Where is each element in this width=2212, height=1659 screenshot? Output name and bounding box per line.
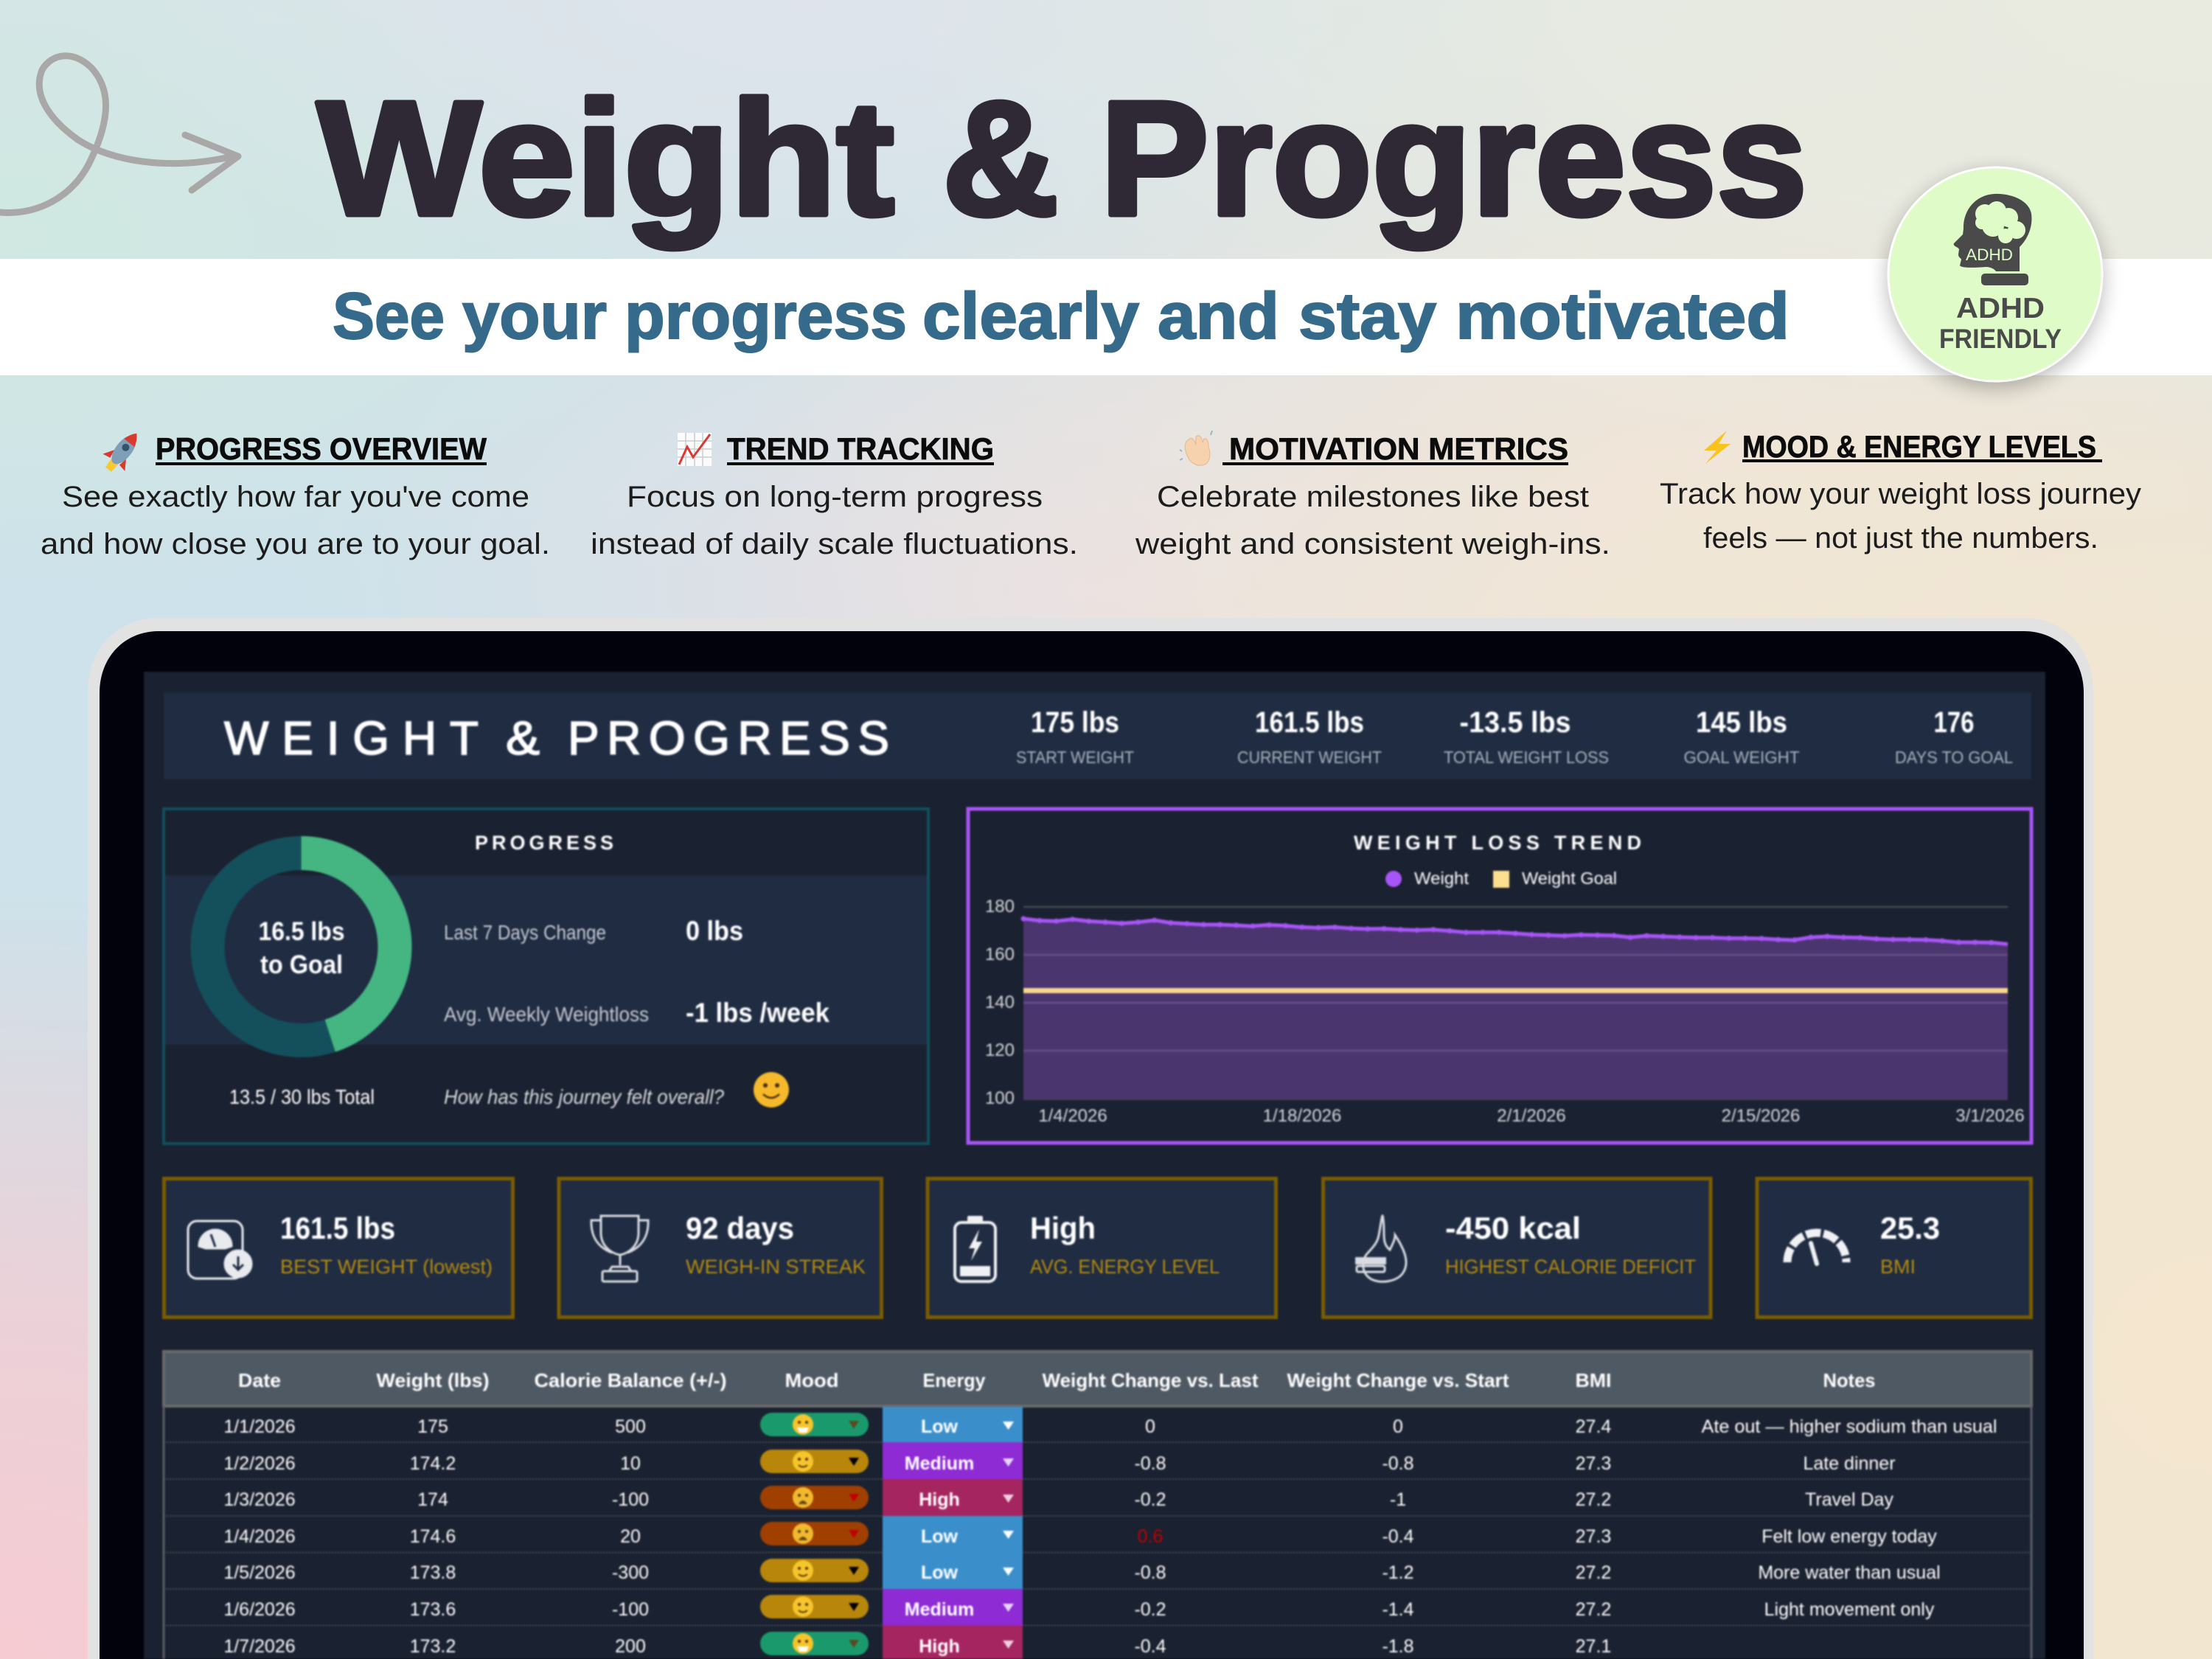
weight line bbox=[1023, 919, 2008, 944]
row 4: 1/4/2026 bbox=[223, 1526, 296, 1547]
row 2: -0.8 bbox=[1382, 1453, 1414, 1474]
subtitle: your bbox=[462, 279, 607, 352]
row 7: High bbox=[919, 1636, 960, 1657]
row 7: 1/7/2026 bbox=[223, 1636, 296, 1657]
icon: head with brain: ADHD bbox=[1966, 246, 2013, 264]
title bbox=[317, 67, 1807, 249]
panel: progress bbox=[164, 809, 928, 1144]
table header: Calorie Balance (+/-) bbox=[534, 1369, 727, 1391]
total label: 13.5 / 30 lbs Total bbox=[229, 1085, 375, 1108]
row 1: Low bbox=[921, 1416, 959, 1437]
feature: progress overview bbox=[41, 425, 550, 560]
card: average energy bbox=[928, 1178, 1276, 1317]
row 4: 0.6 bbox=[1138, 1526, 1163, 1547]
row 3: 174 bbox=[417, 1489, 448, 1510]
table header: BMI bbox=[1575, 1369, 1612, 1391]
row 2: 10 bbox=[620, 1453, 641, 1474]
badge: ADHD friendly bbox=[1888, 167, 2103, 388]
row 5: -300 bbox=[612, 1562, 649, 1583]
row 1: Ate out — higher sodium than usual bbox=[1702, 1416, 1997, 1437]
row 4 bbox=[223, 1516, 1937, 1553]
row 1: 0 bbox=[1145, 1416, 1155, 1437]
card: calorie deficit: HIGHEST CALORIE DEFICIT bbox=[1445, 1256, 1696, 1278]
card: BMI: 25.3 bbox=[1880, 1211, 1940, 1245]
donut label: 16.5 lbs bbox=[258, 917, 345, 946]
card: BMI bbox=[1757, 1178, 2031, 1317]
icon: chart bbox=[678, 433, 712, 466]
line chart bbox=[985, 897, 2025, 1126]
stat: goal weight bbox=[1684, 706, 1799, 767]
legend: Weight Goal bbox=[1522, 869, 1617, 888]
dashboard title: WEIGHT bbox=[224, 712, 479, 765]
row 6: -100 bbox=[612, 1599, 649, 1620]
row 6: Light movement only bbox=[1764, 1599, 1935, 1620]
subtitle: See bbox=[333, 279, 445, 352]
row 3 bbox=[223, 1479, 1893, 1516]
row 5 bbox=[223, 1553, 1941, 1589]
row 4: 27.3 bbox=[1576, 1526, 1611, 1547]
stat: goal weight: 145 lbs bbox=[1696, 706, 1787, 739]
title: & bbox=[942, 67, 1059, 249]
y axis labels: 160 bbox=[985, 945, 1015, 964]
stat: days to goal bbox=[1895, 706, 2013, 767]
stat: start weight bbox=[1016, 706, 1134, 767]
table header: Weight Change vs. Last bbox=[1043, 1369, 1259, 1391]
subtitle: stay bbox=[1298, 279, 1437, 352]
dashboard screen bbox=[144, 672, 2045, 1659]
x axis labels: 1/18/2026 bbox=[1263, 1106, 1341, 1126]
row 2 bbox=[223, 1442, 1896, 1479]
metric: last 7 days: Last 7 Days Change bbox=[444, 921, 606, 944]
description: feels — not just the numbers. bbox=[1703, 522, 2098, 554]
description bbox=[41, 481, 550, 560]
x axis labels: 2/1/2026 bbox=[1497, 1106, 1566, 1126]
row 6: 1/6/2026 bbox=[223, 1599, 296, 1620]
card: calorie deficit bbox=[1323, 1178, 1711, 1317]
subtitle band bbox=[0, 259, 2212, 375]
icon: flame bbox=[1355, 1215, 1406, 1281]
donut label: to Goal bbox=[260, 950, 343, 979]
journey question: How has this journey felt overall? bbox=[444, 1085, 724, 1108]
card: average energy: High bbox=[1030, 1211, 1096, 1245]
metric: last 7 days bbox=[444, 916, 743, 946]
stat: current weight: CURRENT WEIGHT bbox=[1237, 748, 1382, 767]
feature: mood and energy levels bbox=[1660, 429, 2141, 554]
goal line bbox=[1023, 988, 2008, 993]
subtitle bbox=[333, 279, 1790, 352]
card: weigh-in streak: WEIGH-IN STREAK bbox=[686, 1256, 866, 1278]
stat: total weight loss: TOTAL WEIGHT LOSS bbox=[1444, 748, 1609, 767]
icon: rocket bbox=[97, 425, 147, 478]
x axis labels bbox=[1038, 1106, 2025, 1126]
y axis labels bbox=[985, 897, 1015, 1108]
row 2: 174.2 bbox=[410, 1453, 456, 1474]
row 7: 27.1 bbox=[1576, 1636, 1611, 1657]
row 1 bbox=[223, 1407, 1997, 1442]
dashboard title: PROGRESS bbox=[568, 712, 889, 765]
stat: days to goal: 176 bbox=[1933, 706, 1975, 739]
row 2: Medium bbox=[905, 1453, 974, 1474]
row 2: 27.3 bbox=[1576, 1453, 1611, 1474]
icon: lightning bolt bbox=[1704, 431, 1731, 464]
heading: TREND TRACKING bbox=[727, 431, 994, 466]
description: Track how your weight loss journey bbox=[1660, 478, 2141, 510]
row 2: 1/2/2026 bbox=[223, 1453, 296, 1474]
row 3: High bbox=[919, 1489, 960, 1510]
metric: average weekly loss: Avg. Weekly Weightloss bbox=[444, 1003, 649, 1026]
row 1: 175 bbox=[417, 1416, 448, 1437]
title: Progress bbox=[1100, 67, 1807, 249]
metric: average weekly loss bbox=[444, 998, 830, 1028]
panel heading: PROGRESS bbox=[475, 832, 613, 854]
stat: current weight bbox=[1237, 706, 1382, 767]
row 4: -0.4 bbox=[1382, 1526, 1414, 1547]
row 2: -0.8 bbox=[1134, 1453, 1166, 1474]
row 1: 0 bbox=[1393, 1416, 1403, 1437]
row 3: 1/3/2026 bbox=[223, 1489, 296, 1510]
table header: Date bbox=[238, 1369, 281, 1391]
card: best weight: 161.5 lbs bbox=[280, 1211, 395, 1245]
x axis labels: 2/15/2026 bbox=[1722, 1106, 1800, 1126]
row 2: Late dinner bbox=[1803, 1453, 1896, 1474]
subtitle: motivated bbox=[1455, 279, 1790, 352]
table header: Notes bbox=[1823, 1369, 1876, 1391]
arrow: swirl decoration bbox=[0, 56, 238, 212]
row 6 bbox=[223, 1589, 1935, 1625]
description bbox=[591, 481, 1078, 560]
donut chart bbox=[208, 853, 395, 1040]
subtitle: progress bbox=[625, 279, 907, 352]
card: best weight bbox=[164, 1178, 513, 1317]
stat: total weight loss: -13.5 lbs bbox=[1460, 706, 1571, 739]
row 5: 173.8 bbox=[410, 1562, 456, 1583]
table header bbox=[164, 1352, 2031, 1406]
stat: days to goal: DAYS TO GOAL bbox=[1895, 748, 2013, 767]
x axis labels: 1/4/2026 bbox=[1038, 1106, 1107, 1126]
table header: Weight Change vs. Start bbox=[1287, 1369, 1509, 1391]
subtitle: clearly bbox=[922, 279, 1140, 352]
row 3: -100 bbox=[612, 1489, 649, 1510]
card: BMI: BMI bbox=[1880, 1256, 1916, 1278]
icon: head with brain bbox=[1954, 194, 2031, 285]
row 7 bbox=[223, 1625, 1611, 1659]
row 6: 173.6 bbox=[410, 1599, 456, 1620]
stat: total weight loss bbox=[1444, 706, 1609, 767]
row 5: 27.2 bbox=[1576, 1562, 1611, 1583]
row 6: -1.4 bbox=[1382, 1599, 1414, 1620]
stat: goal weight: GOAL WEIGHT bbox=[1684, 748, 1799, 767]
badge text: ADHD bbox=[1956, 293, 2045, 324]
row 5: -1.2 bbox=[1382, 1562, 1414, 1583]
card: average energy: AVG. ENERGY LEVEL bbox=[1030, 1256, 1220, 1278]
heading: MOOD & ENERGY LEVELS bbox=[1742, 429, 2096, 464]
title: Weight bbox=[317, 67, 894, 249]
row 1: 27.4 bbox=[1576, 1416, 1611, 1437]
card: best weight: BEST WEIGHT (lowest) bbox=[280, 1256, 493, 1278]
row 3: 27.2 bbox=[1576, 1489, 1611, 1510]
icon: battery bbox=[955, 1216, 995, 1281]
icon: gauge bbox=[1787, 1233, 1846, 1264]
feature: motivation metrics bbox=[1135, 431, 1610, 560]
description: weight and consistent weigh-ins. bbox=[1135, 528, 1610, 560]
description bbox=[1135, 481, 1610, 560]
chart heading: WEIGHT LOSS TREND bbox=[1354, 832, 1641, 854]
icon: scale bbox=[188, 1221, 251, 1279]
badge text bbox=[1939, 293, 2062, 354]
legend bbox=[1385, 869, 1617, 888]
icon: clapping hands bbox=[1180, 431, 1212, 465]
dashboard header bbox=[164, 692, 2031, 779]
table header: Energy bbox=[923, 1369, 986, 1391]
dashboard title: & bbox=[506, 712, 540, 765]
row 6: -0.2 bbox=[1134, 1599, 1166, 1620]
badge text: FRIENDLY bbox=[1939, 324, 2062, 354]
row 7: 200 bbox=[615, 1636, 646, 1657]
row 5: -0.8 bbox=[1134, 1562, 1166, 1583]
row 3: -1 bbox=[1390, 1489, 1406, 1510]
row 5: More water than usual bbox=[1758, 1562, 1941, 1583]
description bbox=[1660, 478, 2141, 554]
donut label bbox=[258, 917, 345, 979]
row 4: 20 bbox=[620, 1526, 641, 1547]
table header: Mood bbox=[785, 1369, 839, 1391]
x axis labels: 3/1/2026 bbox=[1955, 1106, 2025, 1126]
row 6: 27.2 bbox=[1576, 1599, 1611, 1620]
row 7: -1.8 bbox=[1382, 1636, 1414, 1657]
row 5: Low bbox=[921, 1562, 959, 1583]
card: weigh-in streak bbox=[559, 1178, 882, 1317]
heading: PROGRESS OVERVIEW bbox=[156, 431, 487, 466]
row 7: 173.2 bbox=[410, 1636, 456, 1657]
stat: current weight: 161.5 lbs bbox=[1255, 706, 1364, 739]
subtitle: and bbox=[1158, 279, 1279, 352]
panel: weight loss trend bbox=[968, 809, 2031, 1143]
row 3: Travel Day bbox=[1805, 1489, 1893, 1510]
row 1: 500 bbox=[615, 1416, 646, 1437]
row 6: Medium bbox=[905, 1599, 974, 1620]
dashboard title bbox=[224, 712, 889, 765]
y axis labels: 120 bbox=[985, 1040, 1015, 1060]
description: Celebrate milestones like best bbox=[1157, 481, 1589, 513]
legend: Weight bbox=[1414, 869, 1470, 888]
row 5: 1/5/2026 bbox=[223, 1562, 296, 1583]
metric: average weekly loss: -1 lbs /week bbox=[686, 998, 830, 1028]
table bbox=[164, 1352, 2031, 1659]
y axis labels: 100 bbox=[985, 1088, 1015, 1108]
stat: start weight: START WEIGHT bbox=[1016, 748, 1134, 767]
description: See exactly how far you've come bbox=[62, 481, 529, 513]
device frame bbox=[88, 618, 2093, 1659]
icon: smiley bbox=[754, 1072, 789, 1107]
metric: last 7 days: 0 lbs bbox=[686, 916, 743, 946]
table header: Weight (lbs) bbox=[376, 1369, 490, 1391]
row 1: 1/1/2026 bbox=[223, 1416, 296, 1437]
y axis labels: 180 bbox=[985, 897, 1015, 917]
stat: start weight: 175 lbs bbox=[1031, 706, 1119, 739]
icon: trophy bbox=[591, 1216, 648, 1281]
row 4: Low bbox=[921, 1526, 959, 1547]
y axis labels: 140 bbox=[985, 992, 1015, 1012]
description: Focus on long-term progress bbox=[627, 481, 1043, 513]
heading: MOTIVATION METRICS bbox=[1229, 431, 1568, 466]
row 3: -0.2 bbox=[1134, 1489, 1166, 1510]
area under weight line bbox=[1023, 919, 2008, 1099]
row 7: -0.4 bbox=[1134, 1636, 1166, 1657]
row 4: 174.6 bbox=[410, 1526, 456, 1547]
feature: trend tracking bbox=[591, 431, 1078, 560]
row 4: Felt low energy today bbox=[1761, 1526, 1937, 1547]
card: weigh-in streak: 92 days bbox=[686, 1211, 794, 1245]
description: instead of daily scale fluctuations. bbox=[591, 528, 1078, 560]
description: and how close you are to your goal. bbox=[41, 528, 550, 560]
card: calorie deficit: -450 kcal bbox=[1445, 1211, 1581, 1245]
